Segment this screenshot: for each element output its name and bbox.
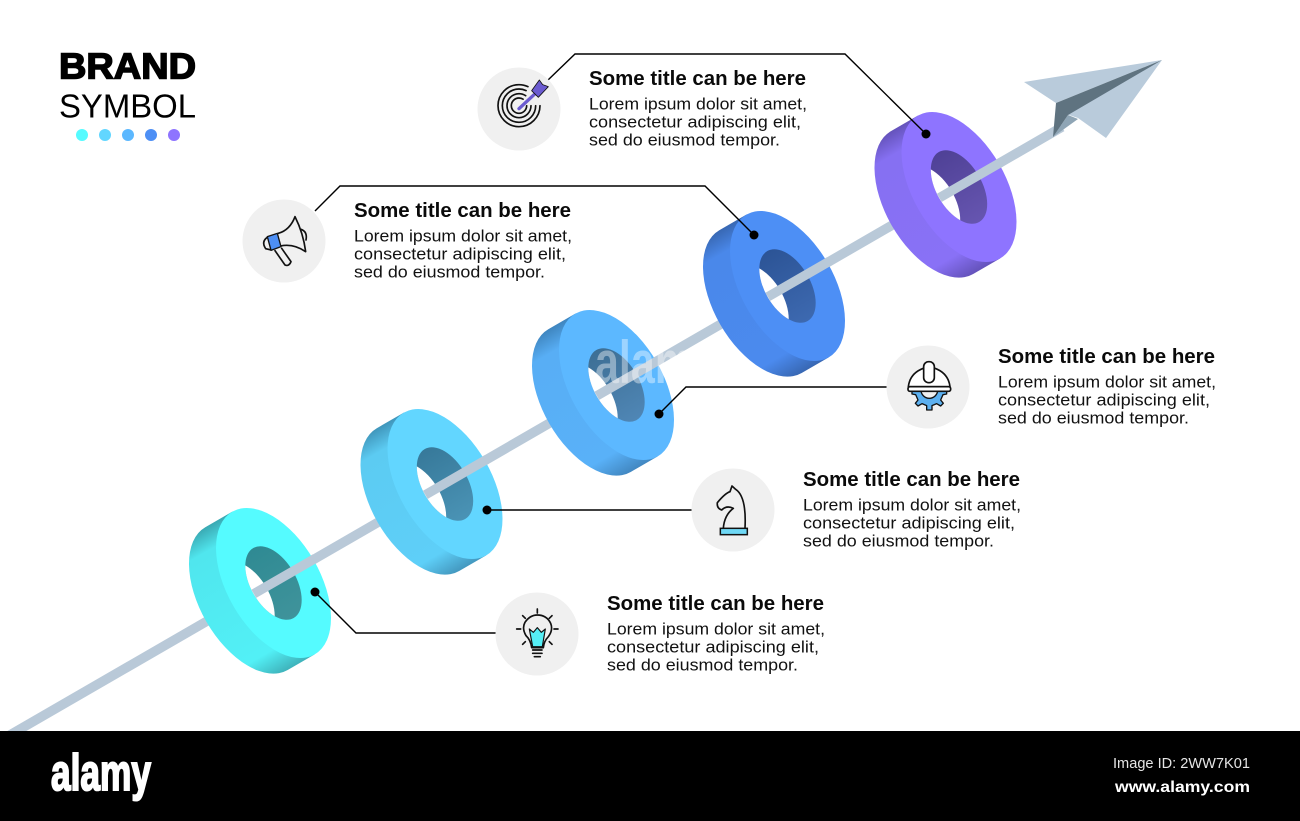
- text block 4: sed do eiusmod tempor.: [803, 532, 994, 550]
- text block 5: Some title can be here: [607, 593, 824, 615]
- ring 5: purple: [851, 91, 1042, 297]
- text block 1: [589, 68, 807, 150]
- paper plane arrowhead: [1024, 60, 1162, 138]
- text block 3: [998, 346, 1216, 428]
- ring 3: light blue: [508, 289, 700, 495]
- text block 5: sed do eiusmod tempor.: [607, 656, 798, 674]
- connector 5: [310, 588, 496, 633]
- icon: light bulb: [496, 592, 578, 676]
- footer bar: [0, 731, 1300, 821]
- icon: megaphone: [242, 200, 326, 282]
- text block 1: Lorem ipsum dolor sit amet,: [589, 96, 807, 114]
- icon: helmet with gear: [886, 346, 970, 428]
- text block 2: sed do eiusmod tempor.: [354, 264, 545, 282]
- text block 3: Some title can be here: [998, 346, 1215, 368]
- footer bar: www.alamy.com: [1114, 779, 1250, 796]
- icon: target: [478, 68, 560, 150]
- text block 3: sed do eiusmod tempor.: [998, 410, 1189, 428]
- ring 1: cyan: [165, 487, 357, 693]
- text block 5: Lorem ipsum dolor sit amet,: [607, 620, 825, 638]
- connector 1: [548, 54, 930, 138]
- brand logo: SYMBOL: [59, 88, 196, 124]
- text block 4: Some title can be here: [803, 469, 1020, 491]
- connector 3: [654, 387, 888, 418]
- connector 4: [482, 506, 692, 514]
- text block 4: [803, 469, 1021, 550]
- ring 4: blue: [679, 190, 871, 396]
- text block 4: Lorem ipsum dolor sit amet,: [803, 496, 1021, 514]
- brand logo: BRAND: [59, 46, 196, 86]
- text block 4: consectetur adipiscing elit,: [803, 514, 1015, 532]
- watermark: alamy: [595, 329, 717, 396]
- text block 2: Some title can be here: [354, 200, 571, 222]
- text block 3: consectetur adipiscing elit,: [998, 392, 1210, 410]
- text block 2: [354, 200, 572, 282]
- footer bar: Image ID: 2WW7K01: [1113, 756, 1250, 772]
- text block 5: consectetur adipiscing elit,: [607, 638, 819, 656]
- text block 1: Some title can be here: [589, 68, 806, 90]
- text block 1: sed do eiusmod tempor.: [589, 132, 780, 150]
- icon: chess knight: [692, 468, 774, 552]
- footer bar: alamy: [51, 744, 151, 801]
- text block 1: consectetur adipiscing elit,: [589, 114, 801, 132]
- text block 2: Lorem ipsum dolor sit amet,: [354, 228, 572, 246]
- text block 2: consectetur adipiscing elit,: [354, 246, 566, 264]
- arrow shaft: [3, 127, 1062, 739]
- connector 2: [315, 186, 758, 240]
- ring 2: sky blue: [337, 388, 528, 594]
- brand logo: [59, 46, 196, 141]
- text block 3: Lorem ipsum dolor sit amet,: [998, 374, 1216, 392]
- text block 5: [607, 593, 825, 674]
